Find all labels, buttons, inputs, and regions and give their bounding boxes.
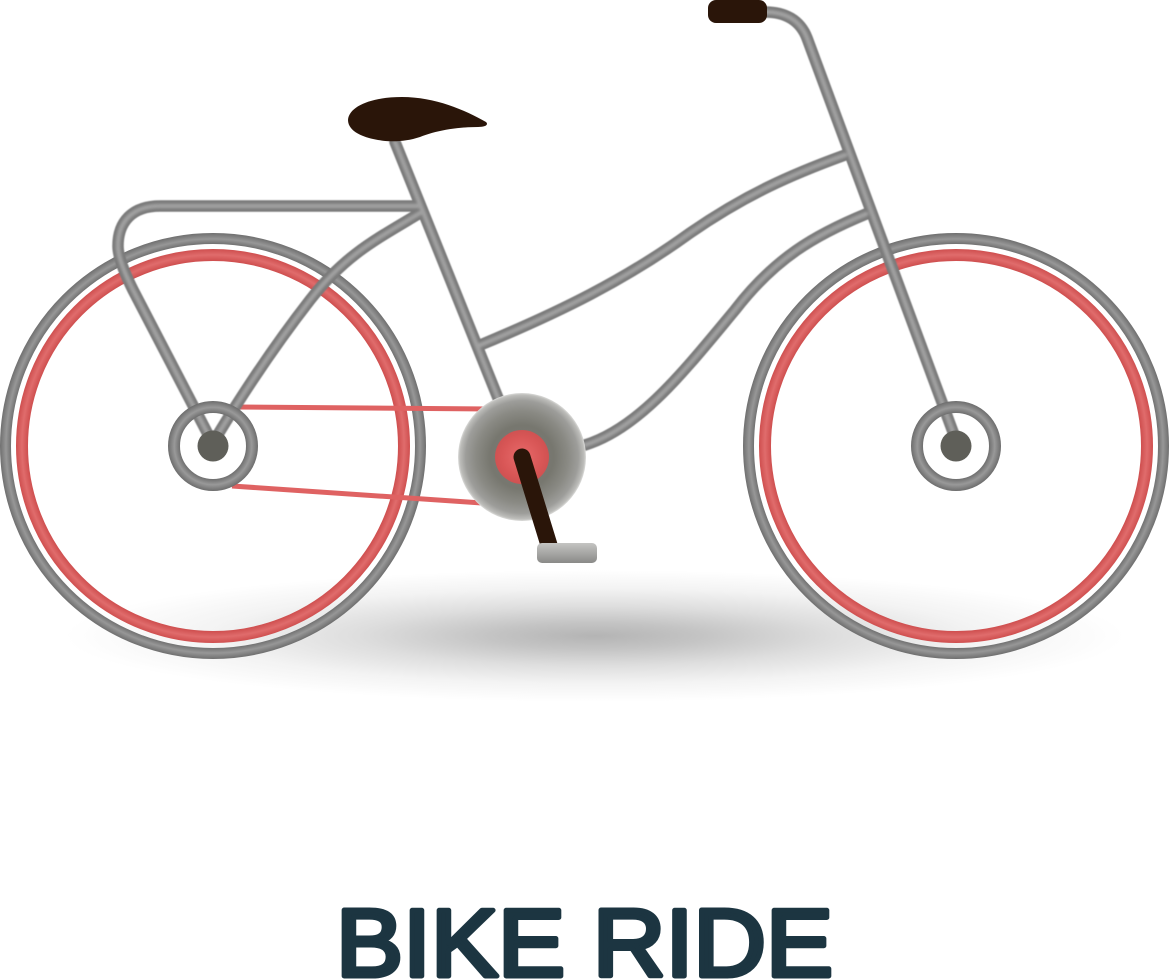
rear wheel — [6, 238, 420, 654]
rear hub — [174, 407, 252, 485]
pedal — [537, 543, 597, 563]
pedal crank — [522, 457, 549, 545]
front wheel — [748, 238, 1164, 654]
bicycle frame — [118, 12, 953, 445]
saddle — [348, 97, 487, 141]
front hub — [917, 407, 995, 485]
chainring — [458, 393, 586, 521]
chain — [232, 407, 490, 503]
handlebar grip — [708, 0, 767, 23]
ground shadow — [65, 570, 1125, 702]
